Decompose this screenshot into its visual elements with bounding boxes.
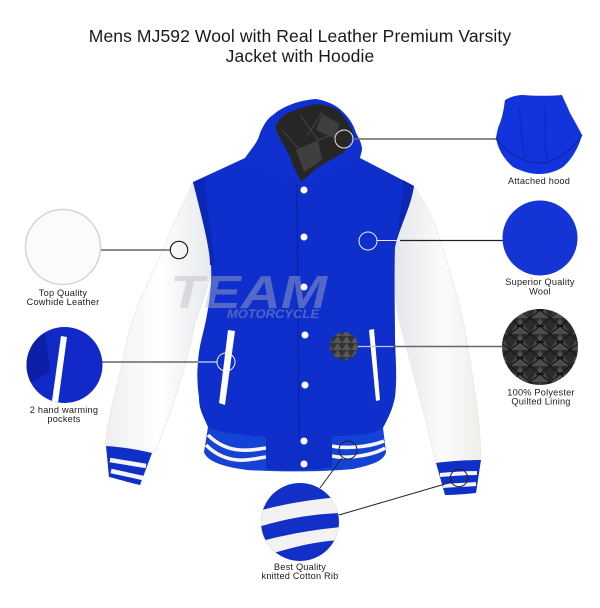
callout: quilted lining: 100% Polyester — [507, 388, 575, 398]
detail: pocket — [26, 327, 103, 403]
callout: cowhide leather: Cowhide Leather — [27, 297, 99, 307]
title: Mens MJ592 Wool with Real Leather Premium Varsity — [89, 26, 511, 46]
hood — [245, 99, 362, 184]
detail: wool — [502, 200, 578, 276]
leader line — [358, 346, 393, 348]
leader line — [102, 361, 198, 363]
black quilted hood lining — [275, 104, 353, 182]
title — [89, 26, 511, 66]
left white leather sleeve — [105, 182, 212, 452]
callout: cotton rib — [258, 441, 468, 581]
right sleeve cuff — [436, 460, 481, 495]
watermark: TEAM — [170, 266, 329, 318]
detail: leather — [26, 210, 100, 284]
pockets — [219, 329, 380, 405]
callout: quilted lining — [358, 309, 578, 406]
leader line — [353, 138, 500, 140]
left sleeve cuff — [106, 446, 152, 485]
blue wool body — [193, 158, 414, 437]
callout: superior quality wool: Superior Quality — [505, 277, 575, 287]
leader lines — [320, 441, 468, 515]
detail: hood — [496, 95, 582, 174]
waist rib — [204, 427, 386, 471]
callout: cowhide leather: Top Quality — [39, 288, 87, 298]
front placket seam — [297, 183, 299, 437]
title: Jacket with Hoodie — [226, 46, 374, 66]
callout: cotton rib: knitted Cotton Rib — [262, 571, 338, 581]
watermark: MOTORCYCLE — [227, 307, 320, 321]
callout: cowhide leather — [26, 210, 188, 307]
leader line — [100, 249, 170, 251]
callout: attached hood — [335, 95, 582, 186]
detail: rib — [258, 483, 342, 561]
detail: lining — [502, 309, 578, 385]
chest shading — [193, 178, 215, 265]
leader line — [359, 232, 503, 250]
callout: cotton rib: Best Quality — [274, 562, 326, 572]
callout: hand warming pockets: pockets — [47, 414, 81, 424]
callout: hand warming pockets — [26, 327, 235, 424]
right white leather sleeve — [394, 186, 481, 465]
callout: hand warming pockets: 2 hand warming — [30, 405, 98, 415]
callout: attached hood: Attached hood — [508, 176, 570, 186]
snap buttons — [300, 186, 308, 468]
callout: superior quality wool: Wool — [529, 286, 551, 296]
lining inset dot — [330, 332, 358, 360]
jacket illustration — [105, 99, 481, 495]
callout: superior quality wool — [359, 200, 578, 296]
callout: quilted lining: Quilted Lining — [511, 396, 571, 406]
